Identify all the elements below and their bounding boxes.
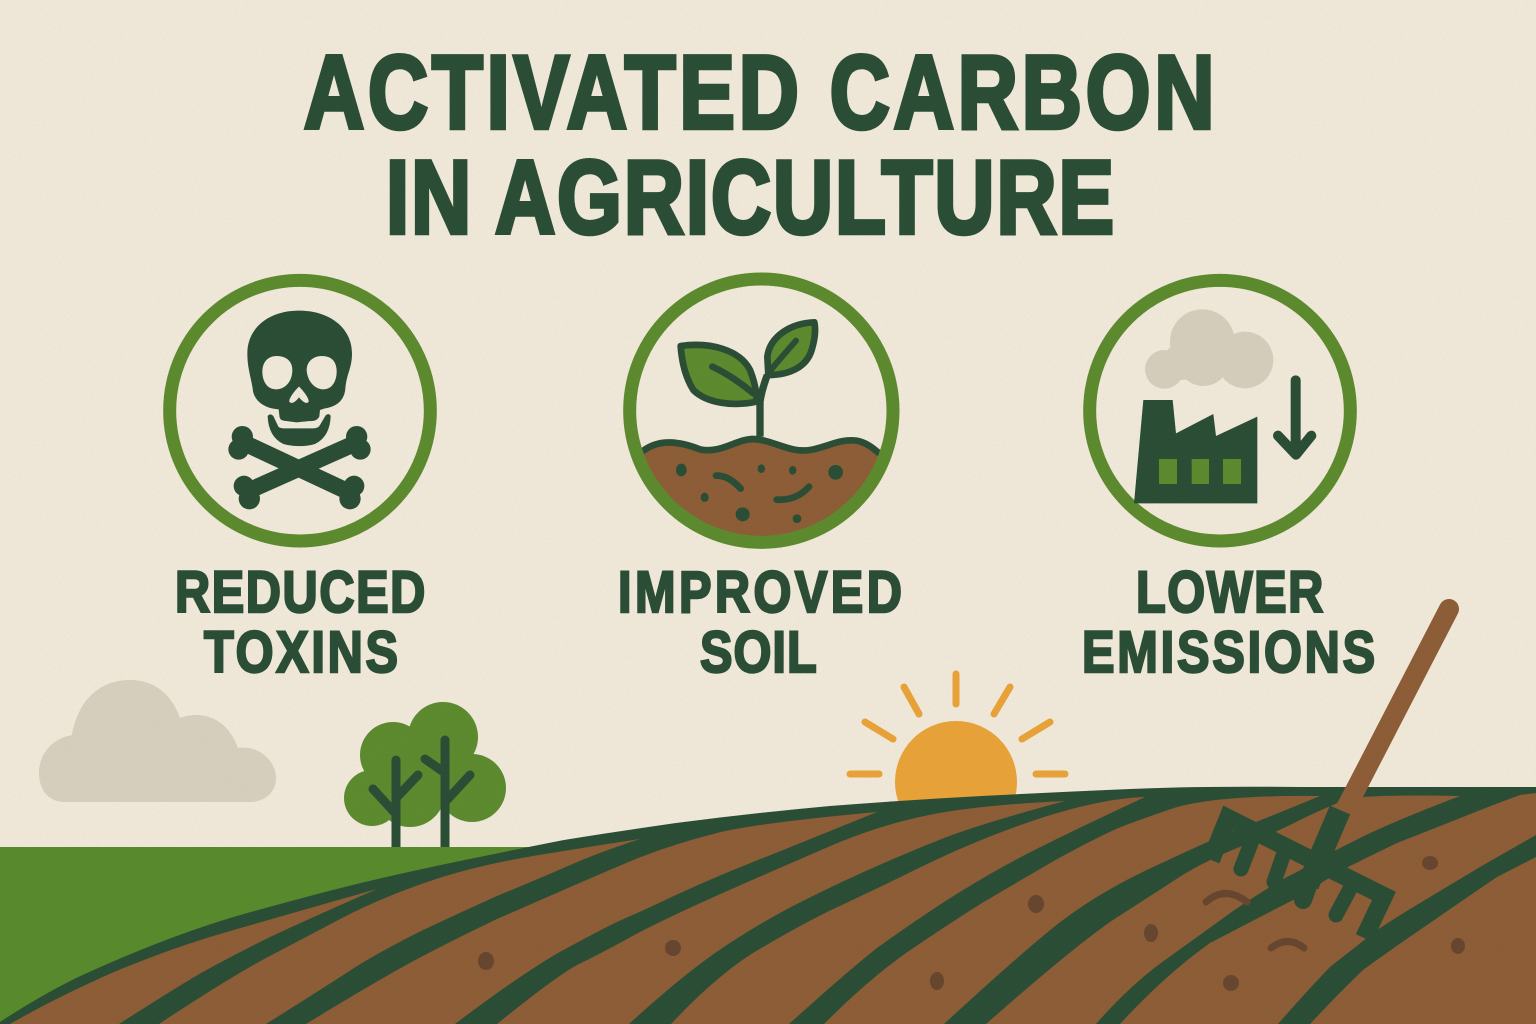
rake handle: [1345, 609, 1449, 810]
label: reduced toxins: [175, 561, 425, 685]
panel: improved soil: [618, 279, 902, 685]
title: ACTIVATED CARBON: [304, 34, 1214, 150]
panel: lower emissions: [1082, 280, 1375, 685]
label: improved soil: SOIL: [700, 621, 817, 685]
panel: reduced toxins: [170, 280, 430, 685]
trees: [344, 702, 506, 849]
ground: green meadow: [0, 847, 560, 1024]
label: lower emissions: [1082, 561, 1375, 685]
sun: [850, 674, 1065, 843]
label: lower emissions: EMISSIONS: [1082, 621, 1375, 685]
label: lower emissions: LOWER: [1136, 561, 1323, 625]
title: [304, 34, 1214, 255]
label: improved soil: IMPROVED: [618, 561, 902, 625]
soil clods: [478, 856, 1465, 991]
icon: seedling in soil in ring: [630, 279, 893, 547]
rake head: [1211, 818, 1384, 938]
title: IN AGRICULTURE: [386, 139, 1114, 255]
label: improved soil: [618, 561, 902, 685]
cloud: [39, 680, 276, 802]
label: reduced toxins: REDUCED: [175, 561, 425, 625]
field: ploughed hill: [0, 787, 1536, 1024]
label: reduced toxins: TOXINS: [204, 621, 398, 685]
icon: skull and crossbones in ring: [170, 280, 430, 541]
rake: [1211, 609, 1449, 938]
icon: factory with falling arrow in ring: [1090, 280, 1350, 541]
